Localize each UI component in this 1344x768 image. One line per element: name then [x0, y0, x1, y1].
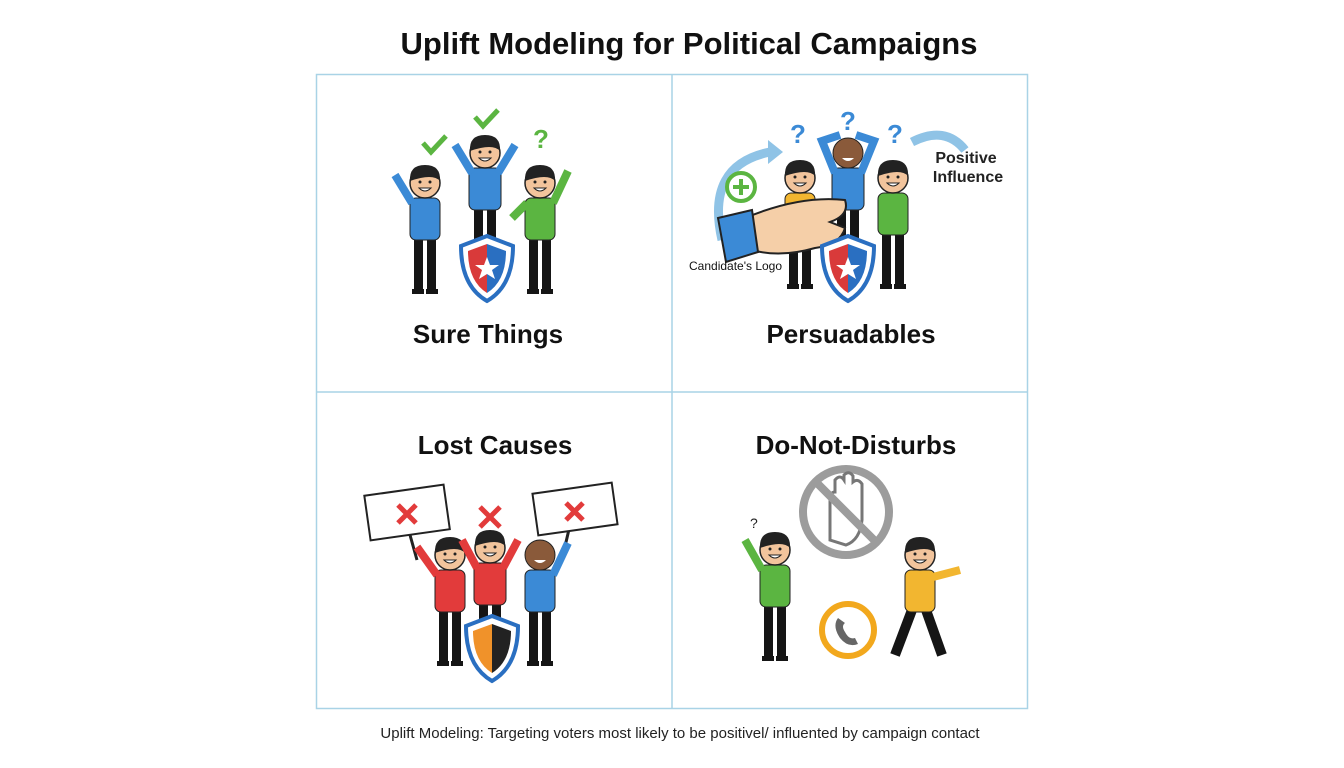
grid frame — [316, 74, 1028, 709]
panel: lost causes — [364, 430, 618, 681]
icon: plus — [727, 173, 755, 201]
icon: voters celebrating: ? — [533, 124, 549, 154]
icon: voters unsure — [785, 106, 908, 289]
icon: annoyed voter: ? — [750, 515, 758, 531]
icon: voters opposed — [417, 530, 568, 666]
text: positive influence: Positive — [935, 150, 997, 167]
icon: phone — [822, 604, 874, 656]
icon: shield — [822, 236, 874, 301]
label: Sure Things — [413, 319, 563, 349]
arrow: influence — [718, 135, 965, 240]
text: positive influence: Influence — [933, 169, 1003, 186]
icon: annoyed voter — [745, 515, 790, 661]
icon: shield — [461, 236, 513, 301]
icon: walking away voter — [895, 537, 960, 655]
icon: voters unsure: ? — [887, 119, 903, 149]
icon: hand — [718, 199, 846, 262]
icon: no hand sign — [803, 469, 889, 555]
icon: shield — [466, 616, 518, 681]
icon: voters celebrating — [395, 110, 568, 294]
icon: voters unsure: ? — [840, 106, 856, 136]
label: Persuadables — [766, 319, 936, 349]
panel: persuadables — [689, 106, 1003, 349]
text: candidate logo: Candidate's Logo — [689, 259, 782, 273]
icon: voters unsure: ? — [790, 119, 806, 149]
label: Lost Causes — [418, 430, 572, 460]
panel: sure things — [395, 110, 568, 349]
title: Uplift Modeling for Political Campaigns — [401, 26, 977, 61]
caption: Uplift Modeling: Targeting voters most likely to be positivel/ influented by campaign contact — [380, 725, 980, 742]
panel: do-not-disturbs — [745, 430, 960, 661]
label: Do-Not-Disturbs — [756, 430, 956, 460]
icon: protest signs — [364, 483, 618, 560]
